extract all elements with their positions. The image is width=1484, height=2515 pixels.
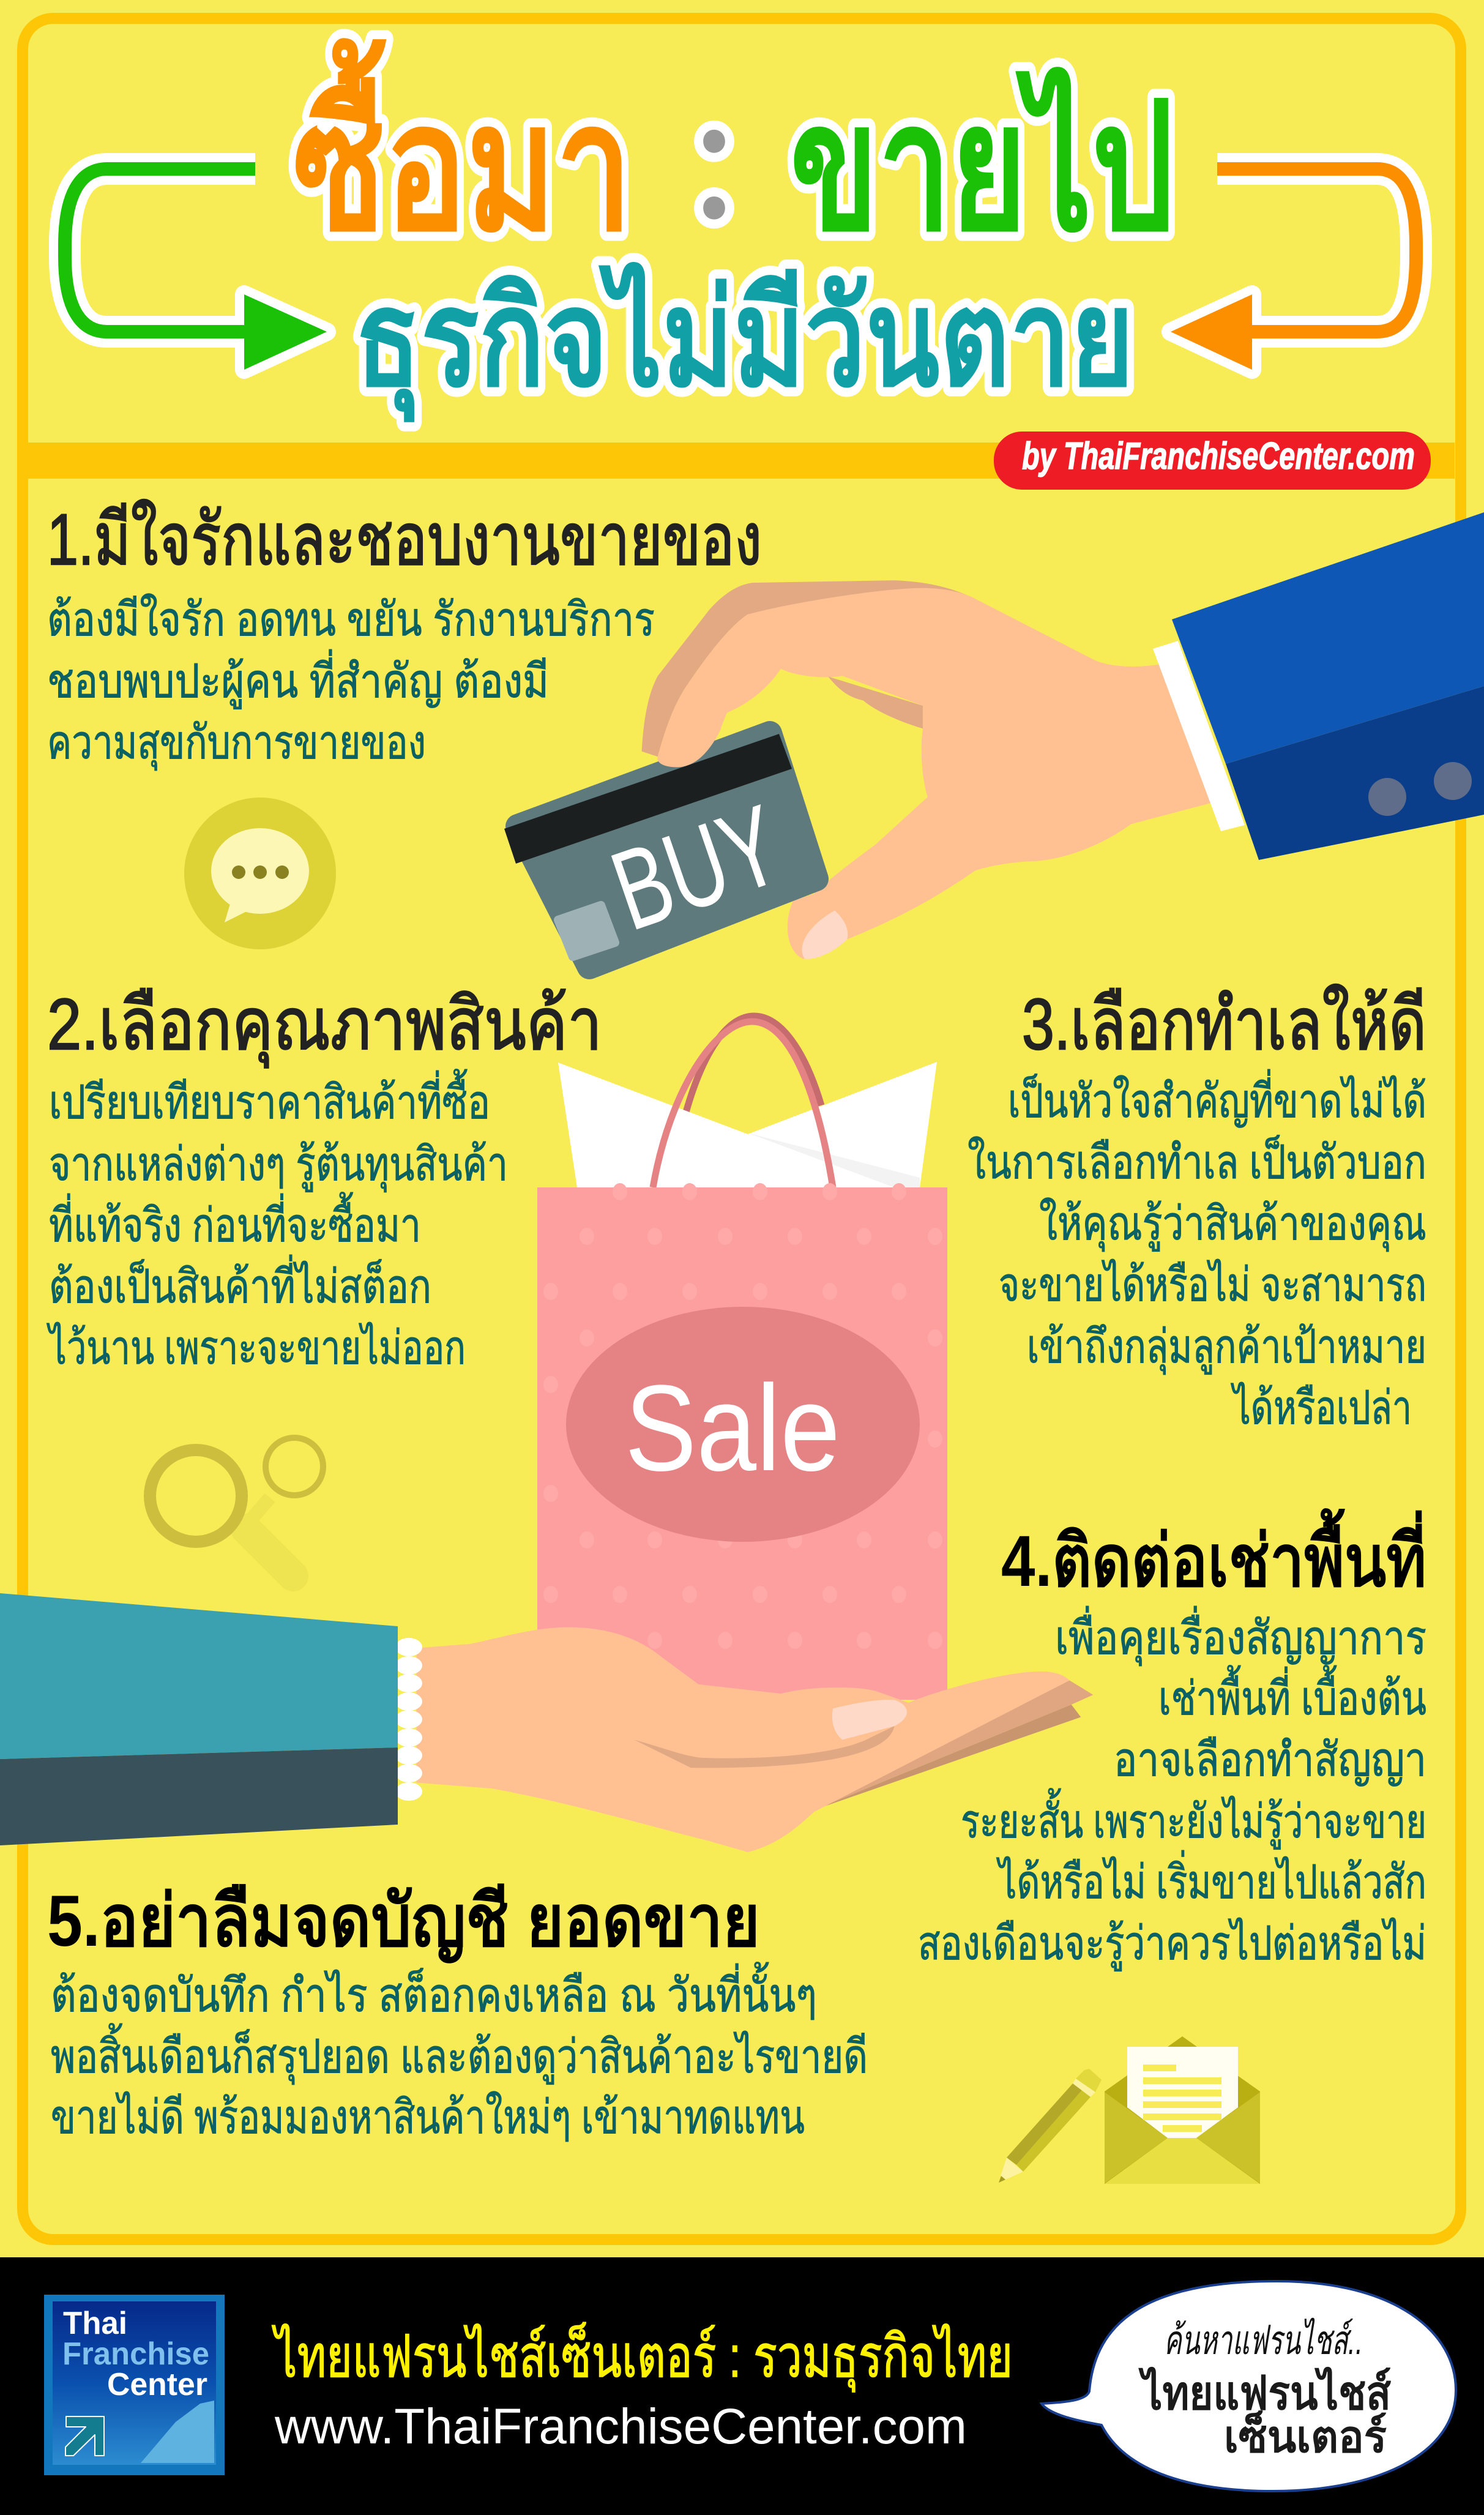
section 3 text: [968, 1069, 1426, 1434]
section 1 text: ความสุขกับการขายของ: [47, 717, 426, 771]
shopping bag: [537, 1016, 947, 1700]
blue sleeve: [1153, 512, 1484, 860]
section 4 text: [918, 1606, 1426, 1971]
section 5 text: ต้องจดบันทึก กำไร สต็อกคงเหลือ ณ วันที่นั้นๆ: [51, 1962, 817, 2022]
receiving hand with teal sleeve: [0, 1593, 1093, 1852]
section 2 text: ต้องเป็นสินค้าที่ไม่สต็อก: [49, 1255, 431, 1313]
section 1 text: ชอบพบปะผู้คน ที่สำคัญ ต้องมี: [47, 649, 549, 709]
arrow: green loop: [65, 169, 327, 370]
footer website url: www.ThaiFranchiseCenter.com: [274, 2399, 967, 2454]
section 3 text: ได้หรือเปล่า: [1230, 1381, 1412, 1434]
icon: pencil: [999, 2069, 1102, 2183]
logo: Thai Franchise Center: Franchise: [62, 2336, 209, 2372]
section 4 text: เพื่อคุยเรื่องสัญญาการ: [1055, 1606, 1426, 1666]
speech bubble callout: เซ็นเตอร์: [1224, 2410, 1387, 2462]
speech bubble callout: ไทยแฟรนไชส์: [1138, 2366, 1392, 2420]
section 2 text: จากแหล่งต่างๆ รู้ต้นทุนสินค้า: [49, 1138, 508, 1192]
footer black bar: [0, 2257, 1484, 2515]
title: :: [691, 26, 737, 265]
section 4 text: อาจเลือกทำสัญญา: [1114, 1734, 1426, 1786]
section 2 text: เปรียบเทียบราคาสินค้าที่ซื้อ: [49, 1069, 490, 1129]
section 5 text: พอสิ้นเดือนก็สรุปยอด และต้องดูว่าสินค้าอะไรขายดี: [51, 2023, 868, 2085]
title: [293, 26, 1174, 422]
orange header divider band: [28, 443, 1455, 479]
hand holding buy card: [504, 580, 1214, 967]
icon: magnifying glasses: [150, 1438, 323, 1576]
speech bubble callout: ค้นหาแฟรนไชส์..: [1164, 2317, 1363, 2363]
title: ขายไป: [790, 65, 1174, 267]
arrow: orange loop: [1171, 169, 1416, 370]
icon: chat bubble: [184, 798, 336, 949]
title: ซื้อมา: [293, 37, 632, 267]
section 2 text: ที่แท้จริง ก่อนที่จะซื้อมา: [49, 1192, 421, 1252]
buy card: [504, 733, 816, 967]
section 5 text: ขายไม่ดี พร้อมมองหาสินค้าใหม่ๆ เข้ามาทดแทน: [51, 2091, 805, 2143]
section 1 text: [47, 593, 655, 771]
section 1 text: ต้องมีใจรัก อดทน ขยัน รักงานบริการ: [47, 593, 655, 646]
icon: envelope with letter: [1105, 2036, 1260, 2184]
logo: Thai Franchise Center: Center: [107, 2367, 207, 2402]
speech bubble callout: [1042, 2281, 1456, 2491]
logo: Thai Franchise Center: [44, 2295, 225, 2475]
shopping bag: Sale: [625, 1360, 840, 1497]
footer text yellow: ไทยแฟรนไชส์เซ็นเตอร์ : รวมธุรกิจไทย: [272, 2322, 1013, 2393]
section 5 text: [51, 1962, 868, 2143]
byline red pill: [994, 432, 1431, 490]
section 2 text: [46, 1069, 508, 1374]
title: ธุรกิจไม่มีวันตาย: [355, 262, 1134, 422]
logo: Thai Franchise Center: Thai: [63, 2306, 127, 2341]
section 2 heading: 2.เลือกคุณภาพสินค้า: [47, 984, 602, 1069]
section 2 text: ไว้นาน เพราะจะขายไม่ออก: [46, 1321, 466, 1374]
buy card: BUY: [597, 781, 796, 955]
section 1 heading: 1.มีใจรักและชอบงานขายของ: [47, 499, 762, 580]
section 5 heading: 5.อย่าลืมจดบัญชี ยอดขาย: [47, 1881, 760, 1964]
